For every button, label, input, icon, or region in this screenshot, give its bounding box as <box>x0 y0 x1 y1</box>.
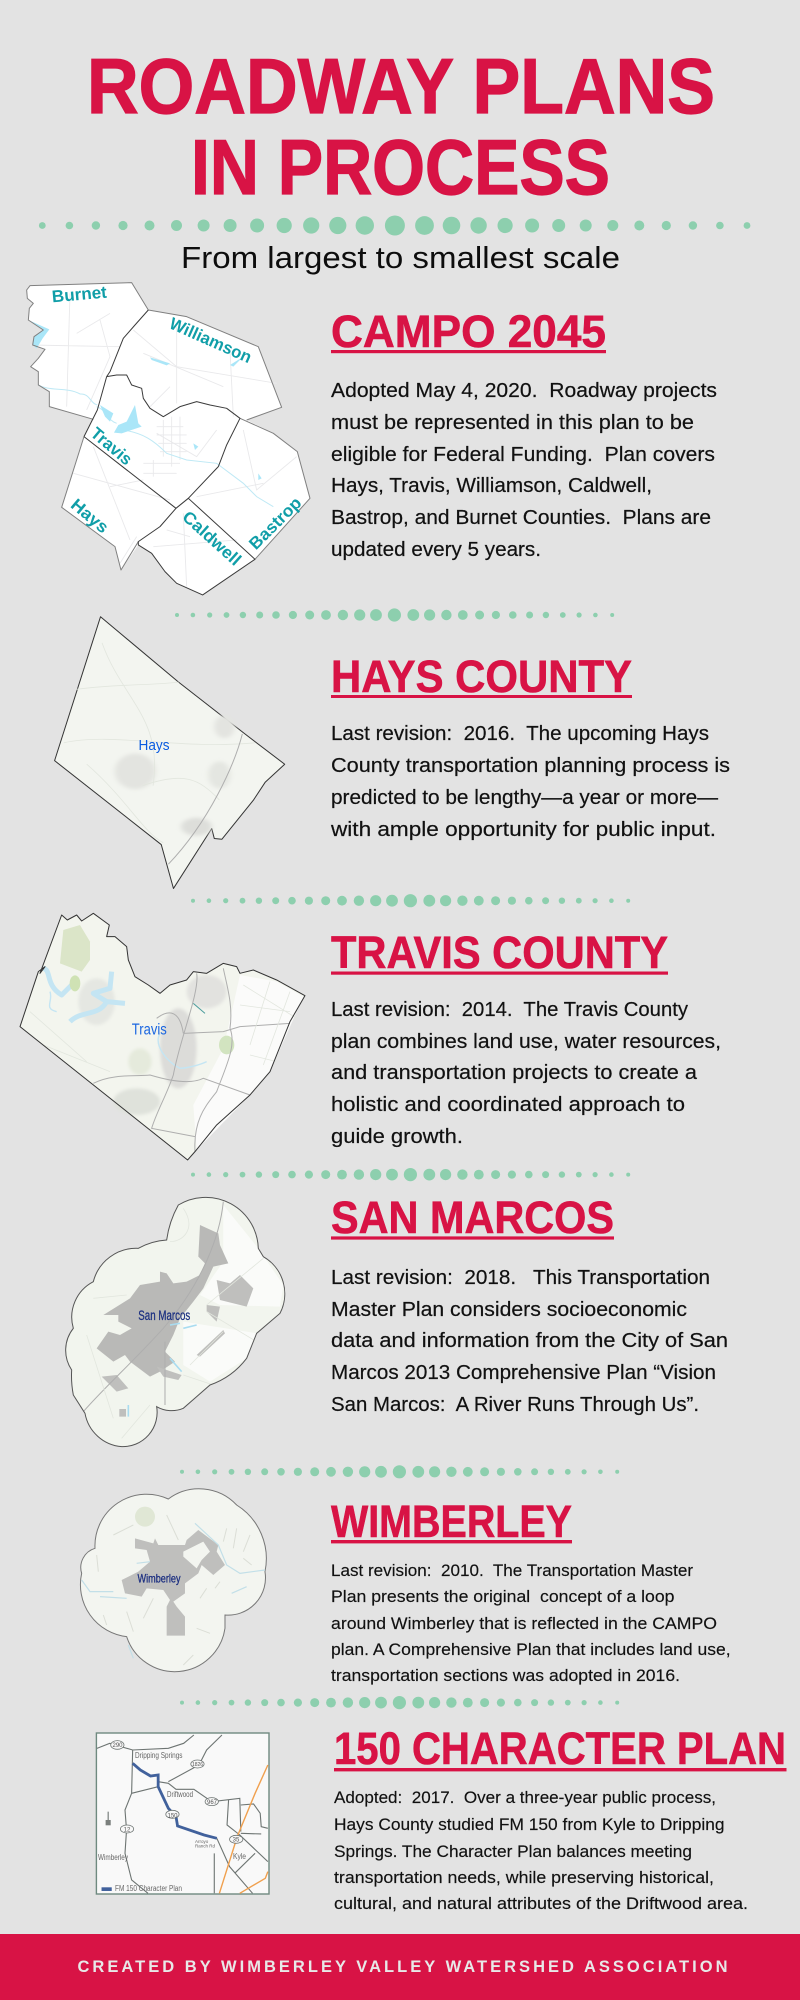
text: San Marcos description: San Marcos: A River Runs Through Us”. <box>331 1394 699 1416</box>
panel: Wimberley <box>80 1489 731 1685</box>
text: San Marcos description: Last revision: 2018. This Transportation <box>331 1267 710 1289</box>
map: CAMPO counties <box>27 283 310 595</box>
text: CAMPO description: must be represented in this plan to be <box>331 412 694 434</box>
text: Travis description: plan combines land use, water resources, <box>331 1031 721 1053</box>
map text labels: Driftwood <box>167 1790 193 1799</box>
text: Wimberley description <box>331 1562 731 1685</box>
map: Hays County <box>55 617 285 888</box>
map text labels: 290 <box>112 1743 123 1749</box>
map text labels: 12 <box>124 1828 131 1834</box>
text: San Marcos description: data and information from the City of San <box>331 1330 728 1352</box>
subtitle: From largest to smallest scale <box>181 240 620 275</box>
county labels: Burnet <box>51 283 108 306</box>
map text labels: Wimberley <box>98 1853 128 1862</box>
heading: Wimberley: WIMBERLEY <box>331 1496 572 1547</box>
text: San Marcos description <box>331 1267 728 1416</box>
footer band <box>0 1934 800 2000</box>
text: Hays description <box>330 723 730 841</box>
panel: 150 Character Plan <box>96 1723 786 1913</box>
panel: CAMPO 2045 <box>27 283 717 595</box>
text: CAMPO description: Bastrop, and Burnet Counties. Plans are <box>331 507 711 529</box>
title: IN PROCESS <box>191 123 610 211</box>
map: San Marcos <box>66 1197 285 1447</box>
map text labels: Arroyo <box>195 1839 209 1844</box>
county labels: Williamson <box>166 314 255 367</box>
text: Wimberley description: Plan presents the original concept of a loop <box>331 1588 674 1606</box>
text: 150 Character Plan description: cultural, and natural attributes of the Driftwood area. <box>334 1895 748 1913</box>
map label: Travis: Travis <box>132 1022 167 1038</box>
panel: San Marcos <box>66 1192 728 1447</box>
text: 150 Character Plan description: transportation needs, while preserving historical, <box>334 1869 714 1887</box>
text: CAMPO description: Adopted May 4, 2020. Roadway projects <box>331 380 717 402</box>
map text labels: 1826 <box>192 1762 203 1768</box>
text: Travis description: Last revision: 2014. The Travis County <box>331 999 688 1021</box>
map text labels: 35 <box>233 1838 240 1844</box>
text: Hays description: County transportation planning process is <box>331 755 730 777</box>
text: Travis description <box>331 999 721 1148</box>
heading: San Marcos: SAN MARCOS <box>331 1192 614 1243</box>
text: San Marcos description: Master Plan considers socioeconomic <box>331 1299 687 1321</box>
county labels <box>51 283 305 570</box>
text: 150 Character Plan description: Springs. The Character Plan balances meeting <box>334 1843 692 1861</box>
map label: Wimberley: Wimberley <box>138 1572 180 1586</box>
text: Hays description: with ample opportunity for public input. <box>330 819 716 841</box>
text: CAMPO description: Hays, Travis, Williamson, Caldwell, <box>331 475 652 497</box>
map text labels: 967 <box>207 1800 218 1806</box>
text: 150 Character Plan description <box>334 1789 748 1913</box>
map text labels: Dripping Springs <box>135 1751 182 1760</box>
map: FM 150 corridor <box>96 1733 269 1894</box>
heading: Travis County: TRAVIS COUNTY <box>331 927 668 978</box>
map text labels: Kyle <box>233 1852 246 1861</box>
footer credit: CREATED BY WIMBERLEY VALLEY WATERSHED ASSOCIATION <box>78 1958 728 1976</box>
map: Wimberley <box>80 1489 266 1672</box>
title <box>87 42 715 211</box>
county labels: Hays <box>67 495 112 537</box>
text: 150 Character Plan description: Adopted: 2017. Over a three-year public process, <box>334 1789 716 1807</box>
text: Hays description: Last revision: 2016. The upcoming Hays <box>331 723 709 745</box>
title: ROADWAY PLANS <box>87 42 715 130</box>
text: CAMPO description: eligible for Federal Funding. Plan covers <box>331 444 715 466</box>
text: Travis description: holistic and coordinated approach to <box>331 1094 685 1116</box>
text: Travis description: and transportation projects to create a <box>331 1062 698 1084</box>
text: Travis description: guide growth. <box>331 1126 463 1148</box>
county labels: Travis <box>87 424 136 469</box>
text: CAMPO description <box>331 380 717 561</box>
text: CAMPO description: updated every 5 years. <box>331 539 541 561</box>
panel: Travis County <box>20 913 721 1160</box>
map text labels: Ranch Rd <box>195 1844 216 1848</box>
county labels: Bastrop <box>245 493 305 553</box>
heading: Hays County: HAYS COUNTY <box>331 651 632 702</box>
panel: Hays County <box>55 617 730 888</box>
text: 150 Character Plan description: Hays County studied FM 150 from Kyle to Dripping <box>334 1816 724 1834</box>
map text labels <box>98 1743 246 1893</box>
text: Wimberley description: around Wimberley that is reflected in the CAMPO <box>331 1615 717 1633</box>
text: Hays description: predicted to be lengthy—a year or more— <box>331 787 718 809</box>
map: Travis County <box>20 913 305 1160</box>
county labels: Caldwell <box>179 507 245 570</box>
text: San Marcos description: Marcos 2013 Comprehensive Plan “Vision <box>331 1362 716 1384</box>
map label: Hays: Hays <box>138 737 170 754</box>
map text labels: FM 150 Character Plan <box>115 1884 182 1893</box>
heading: CAMPO 2045: CAMPO 2045 <box>331 306 606 357</box>
map label: San Marcos: San Marcos <box>138 1308 190 1323</box>
text: Wimberley description: Last revision: 2010. The Transportation Master <box>331 1562 694 1580</box>
text: Wimberley description: transportation sections was adopted in 2016. <box>331 1667 680 1685</box>
map text labels: 150 <box>167 1814 178 1820</box>
text: Wimberley description: plan. A Comprehensive Plan that includes land use, <box>331 1641 731 1659</box>
